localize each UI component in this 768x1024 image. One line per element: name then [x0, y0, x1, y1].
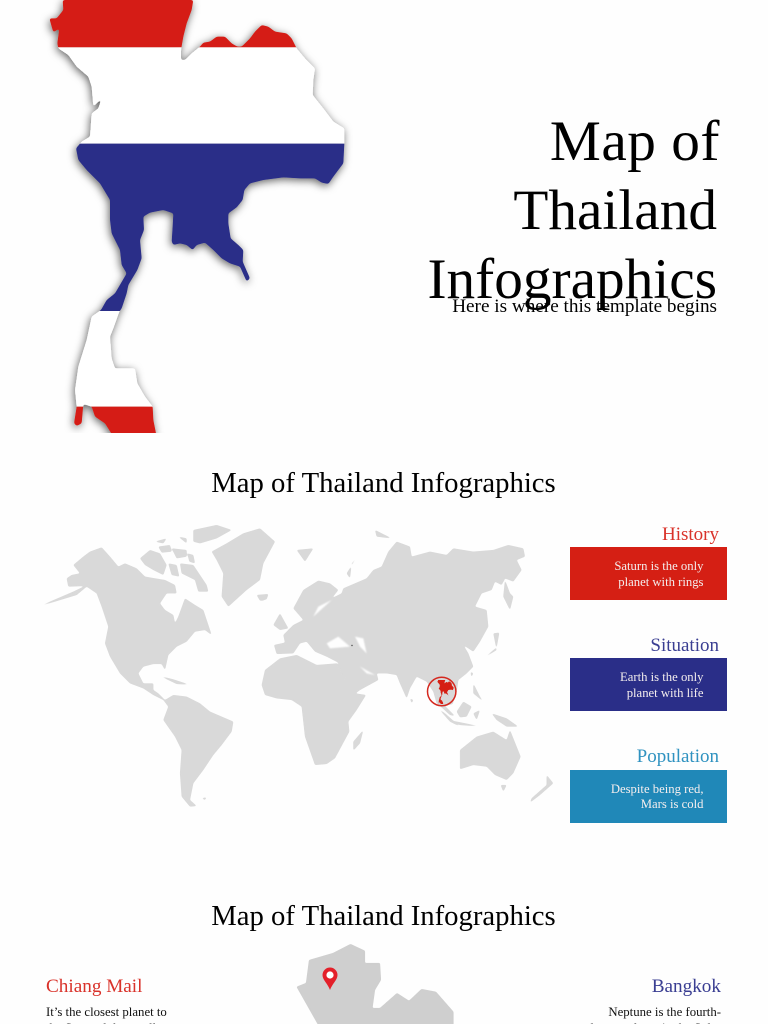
panel: Population: Mars is cold — [641, 797, 704, 811]
panel: Situation: planet with life — [627, 686, 704, 700]
label: Population: Population — [637, 746, 719, 767]
title: Infographics — [427, 248, 717, 311]
text: Bangkok description: Neptune is the fourth- — [608, 1005, 721, 1019]
panel: History — [570, 547, 727, 600]
panel: History: Saturn is the only — [614, 559, 704, 573]
section heading: world map: Map of Thailand Infographics — [211, 467, 556, 499]
section heading: Thailand map: Map of Thailand Infographics — [211, 900, 556, 932]
panel: History: planet with rings — [618, 574, 704, 588]
subtitle: Here is where this template begins — [452, 296, 717, 317]
text: Chiang Mail description: It’s the closest planet to — [46, 1005, 167, 1019]
panel: Population — [570, 770, 727, 822]
panel: Population: Despite being red, — [611, 782, 704, 796]
panel: Situation: Earth is the only — [620, 670, 704, 684]
americas — [38, 525, 275, 807]
panel: Situation — [570, 658, 727, 711]
Thailand flag map — [44, 0, 350, 433]
label: Chiang Mail: Chiang Mail — [46, 976, 142, 997]
label: Bangkok: Bangkok — [652, 976, 721, 997]
europe, asia, africa, oceania — [260, 530, 553, 803]
title: Map of — [550, 110, 720, 173]
text: Bangkok description — [590, 1005, 721, 1024]
location marker: Thailand — [426, 676, 457, 706]
title: Thailand — [513, 179, 717, 242]
label: History: History — [662, 524, 719, 545]
title — [427, 110, 720, 311]
icon: map pin — [322, 968, 338, 990]
label: Situation: Situation — [650, 635, 719, 656]
